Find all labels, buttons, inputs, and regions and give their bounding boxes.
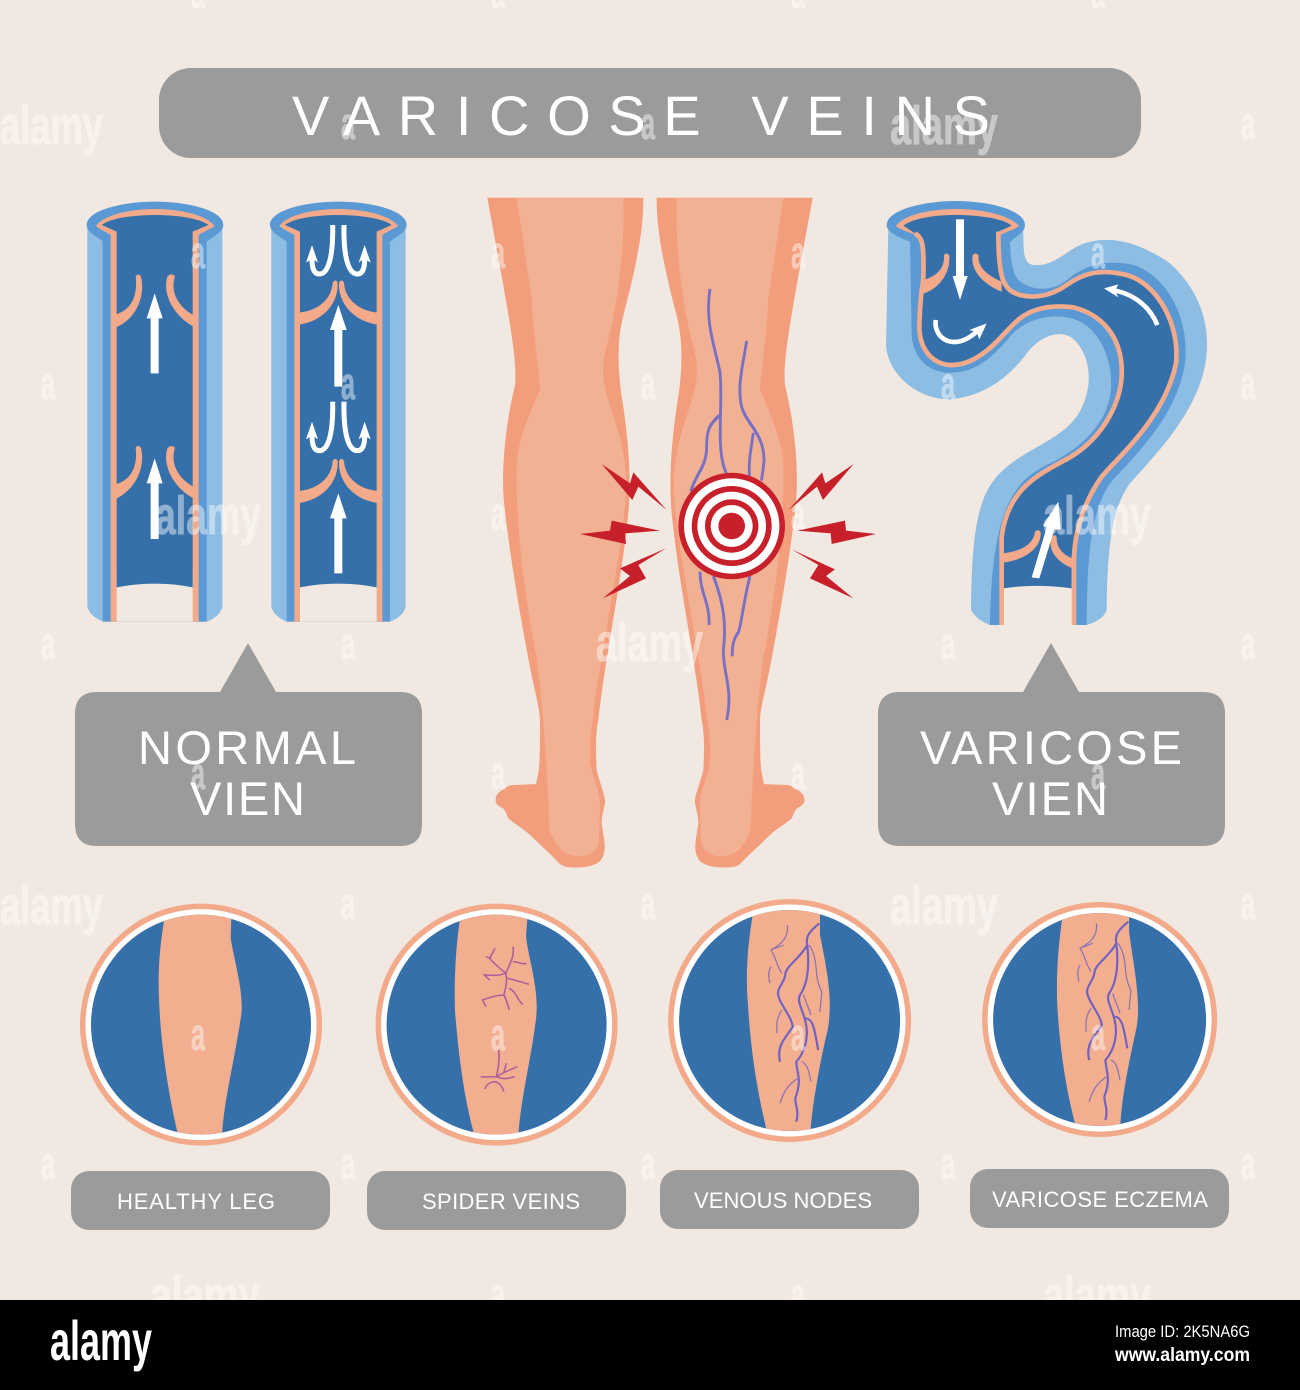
stock watermarks: a: [41, 358, 56, 409]
pain bolts left: [580, 464, 667, 598]
arrow: downward reflux: [953, 219, 968, 300]
label: venous nodes: VENOUS NODES: [694, 1188, 872, 1213]
normal vein tube with closed valves: [270, 202, 407, 622]
stock watermarks: alamy: [150, 1266, 260, 1326]
callout: varicose vein: VIEN: [992, 772, 1108, 825]
stock watermarks: a: [791, 227, 806, 278]
label: varicose eczema: VARICOSE ECZEMA: [992, 1187, 1208, 1212]
callout: varicose vein: VARICOSE: [920, 721, 1182, 774]
pain target: [678, 473, 785, 579]
stock watermarks: a: [791, 488, 806, 539]
stock watermarks: a: [1091, 748, 1106, 799]
arrow: main flow lower: [330, 493, 347, 573]
stock watermarks: a: [41, 1138, 56, 1189]
callout: normal vein: [75, 643, 422, 846]
title banner: [159, 68, 1141, 158]
stock watermarks: a: [941, 1138, 956, 1189]
arrows: backflow stems: [312, 225, 365, 451]
arrow: upward flow at base: [1032, 502, 1061, 578]
stock watermarks: alamy: [1043, 486, 1151, 546]
stock watermarks: alamy: [596, 613, 703, 673]
arrow: swirl in pool: [936, 320, 980, 342]
stock watermarks: a: [1091, 227, 1106, 278]
circle: venous nodes: [668, 899, 911, 1142]
swollen veins on right leg: [691, 289, 764, 720]
stock watermarks: alamy: [890, 876, 998, 936]
stock watermarks: a: [1091, 1009, 1106, 1060]
circle: healthy leg: [80, 904, 322, 1146]
varicose vein tube: [886, 201, 1207, 625]
label: healthy leg: HEALTHY LEG: [117, 1189, 275, 1214]
stock watermarks: a: [791, 1269, 806, 1320]
stock footer bar: alamy: [50, 1309, 152, 1372]
stock watermarks: alamy: [0, 876, 103, 936]
label: varicose eczema: [970, 1169, 1229, 1228]
stock watermarks: a: [341, 618, 356, 669]
stock watermarks: a: [1241, 618, 1256, 669]
stock watermarks: a: [641, 1138, 656, 1189]
stock watermarks: alamy: [890, 96, 998, 156]
stock watermarks: a: [641, 878, 656, 929]
stock watermarks: a: [41, 618, 56, 669]
stock watermarks: a: [641, 358, 656, 409]
callout: normal vein: NORMAL: [138, 721, 356, 774]
stock watermarks: a: [191, 1009, 206, 1060]
arrow: main flow upper: [330, 305, 347, 387]
callout: normal vein: VIEN: [190, 772, 305, 825]
arrow: curved flow at bend: [1112, 290, 1157, 325]
stock footer bar: www.alamy.com: [1114, 1345, 1250, 1366]
stock watermarks: a: [941, 358, 956, 409]
stock watermarks: a: [491, 1009, 506, 1060]
stock watermarks: a: [341, 878, 356, 929]
stock watermarks: a: [191, 227, 206, 278]
stock watermarks: a: [1241, 358, 1256, 409]
arrowheads: backflow: [306, 245, 371, 439]
label: healthy leg: [71, 1171, 330, 1230]
stock watermarks: a: [791, 1009, 806, 1060]
stock watermarks: a: [491, 748, 506, 799]
stock watermarks: a: [491, 1269, 506, 1320]
stock watermarks: alamy: [1043, 1266, 1151, 1326]
circle: spider veins: [376, 904, 618, 1146]
legs illustration: [487, 198, 813, 867]
stock watermarks: a: [1241, 1138, 1256, 1189]
stock watermarks: alamy: [155, 486, 261, 546]
arrow: upward flow lower: [147, 458, 163, 539]
affected right leg: [657, 198, 813, 867]
callout: varicose vein: [878, 643, 1225, 846]
pain bolts right: [789, 464, 876, 598]
normal vein tube with open valves: [87, 202, 223, 622]
healthy left leg: [487, 198, 643, 867]
circle: varicose eczema: [982, 902, 1217, 1137]
arrow: upward flow upper: [147, 293, 163, 373]
stock watermarks: a: [341, 1138, 356, 1189]
stock watermarks: a: [941, 618, 956, 669]
label: venous nodes: [660, 1170, 919, 1229]
stock footer bar: [0, 1300, 1300, 1390]
stock watermarks: a: [641, 98, 656, 149]
stock watermarks: a: [491, 227, 506, 278]
stock watermarks: a: [1241, 878, 1256, 929]
title banner: VARICOSE VEINS: [292, 84, 990, 147]
stock watermarks: alamy: [0, 96, 103, 156]
stock footer bar: Image ID: 2K5NA6G: [1115, 1322, 1250, 1341]
stock watermarks: a: [1241, 98, 1256, 149]
stock watermarks: a: [491, 488, 506, 539]
stock watermarks: a: [341, 98, 356, 149]
stock watermarks: a: [191, 748, 206, 799]
stock watermarks: a: [791, 748, 806, 799]
label: spider veins: [367, 1171, 626, 1230]
stock watermarks: a: [341, 358, 356, 409]
label: spider veins: SPIDER VEINS: [422, 1189, 580, 1214]
